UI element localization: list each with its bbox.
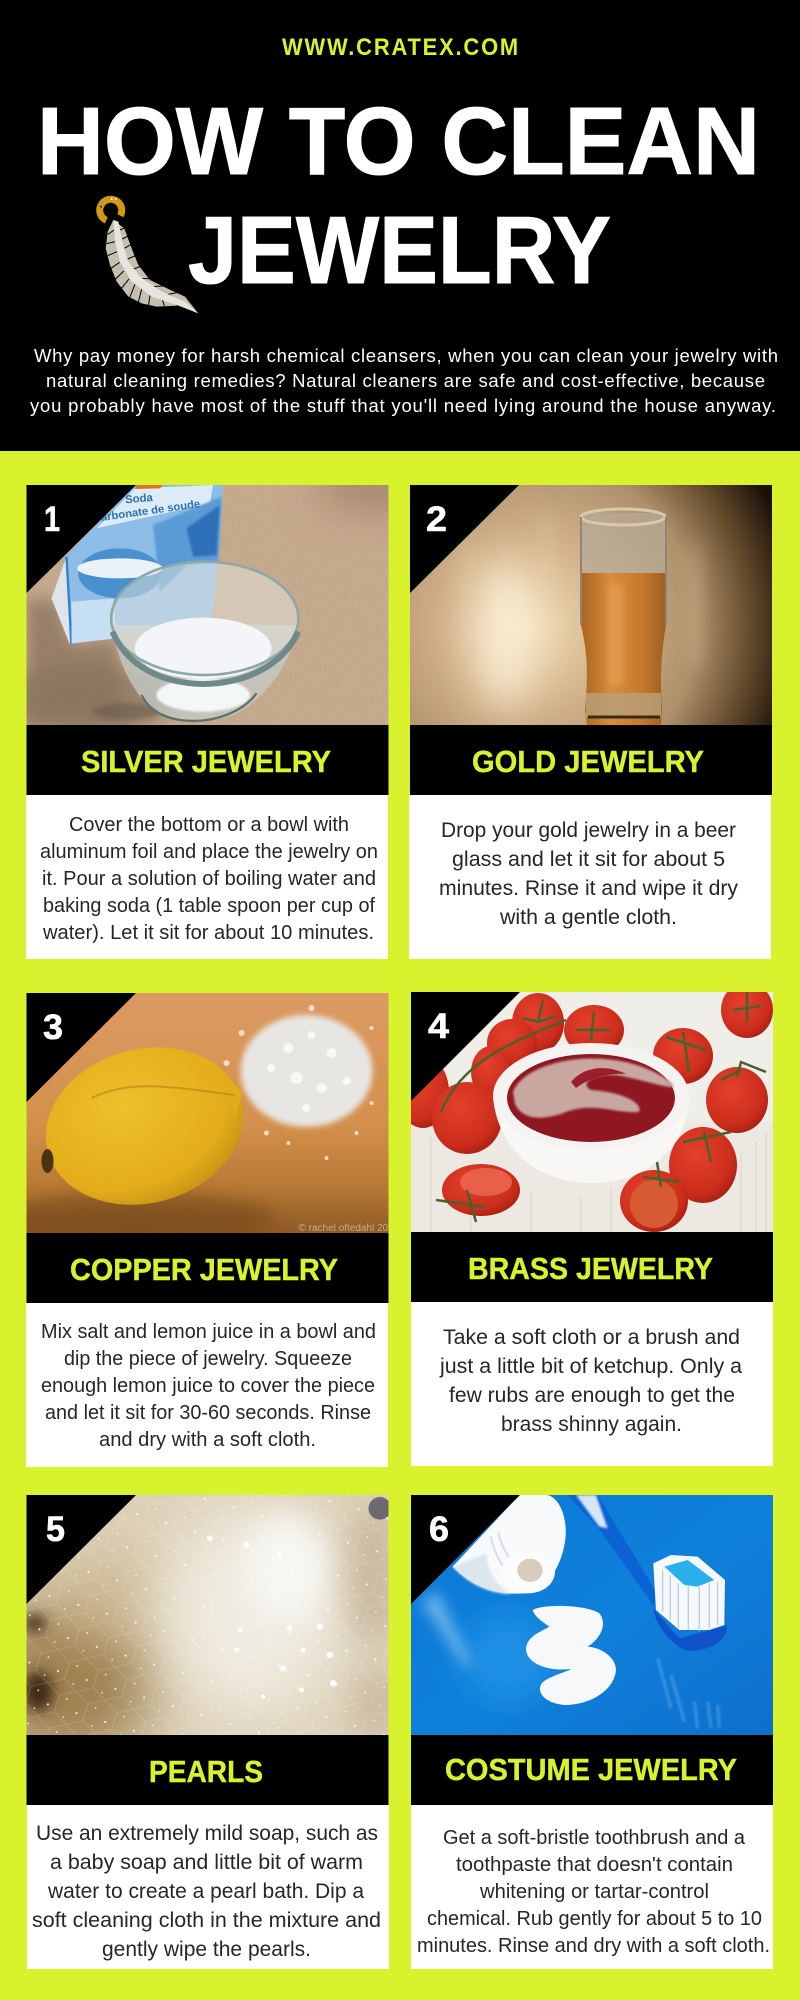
panel: silver jewelry bbox=[26, 485, 388, 959]
body text: water). Let it sit for about 10 minutes. bbox=[42, 921, 374, 944]
body text: Drop your gold jewelry in a beer bbox=[441, 818, 736, 842]
body text: minutes. Rinse and dry with a soft cloth. bbox=[417, 1934, 770, 1957]
number: 6 bbox=[429, 1510, 449, 1549]
photo: soap foam bbox=[26, 1495, 388, 1735]
intro paragraph bbox=[30, 345, 778, 416]
body text: glass and let it sit for about 5 bbox=[452, 847, 725, 871]
body text: enough lemon juice to cover the piece bbox=[41, 1374, 375, 1397]
heading: BRASS JEWELRY bbox=[468, 1251, 713, 1286]
body text bbox=[40, 813, 378, 944]
intro paragraph: natural cleaning remedies? Natural cleaners are safe and cost-effective, because bbox=[46, 370, 765, 391]
text panel bbox=[26, 1303, 388, 1467]
heading: COSTUME JEWELRY bbox=[445, 1752, 737, 1787]
text panel bbox=[411, 1302, 773, 1466]
body text: Take a soft cloth or a brush and bbox=[443, 1325, 740, 1349]
panel: pearls bbox=[0, 1495, 400, 1969]
number: 1 bbox=[44, 500, 60, 539]
title band bbox=[411, 1735, 773, 1805]
body text: and dry with a soft cloth. bbox=[99, 1428, 316, 1451]
panel: copper jewelry bbox=[0, 993, 400, 1467]
body text: baking soda (1 table spoon per cup of bbox=[43, 894, 375, 917]
intro paragraph: Why pay money for harsh chemical cleansers, when you can clean your jewelry with bbox=[34, 345, 778, 366]
title: JEWELRY bbox=[188, 197, 611, 304]
photo: lemon and salt: © rachel oftedahl 2012 bbox=[298, 1223, 400, 1234]
corner triangle bbox=[411, 1495, 520, 1604]
text panel bbox=[409, 795, 771, 959]
photo: ketchup and tomatoes bbox=[397, 982, 773, 1232]
number: 3 bbox=[43, 1008, 63, 1047]
title band bbox=[411, 1232, 773, 1302]
title band bbox=[26, 1735, 388, 1805]
body text: toothpaste that doesn't contain bbox=[456, 1853, 733, 1876]
text panel bbox=[26, 795, 388, 959]
corner triangle bbox=[411, 992, 520, 1101]
corner triangle bbox=[26, 993, 136, 1102]
heading: SILVER JEWELRY bbox=[81, 744, 331, 779]
box label text: arbonate de soude bbox=[100, 498, 201, 524]
body text: gently wipe the pearls. bbox=[102, 1937, 311, 1961]
website url: WWW.CRATEX.COM bbox=[282, 34, 520, 61]
body text bbox=[417, 1826, 770, 1957]
box label text: Soda bbox=[125, 492, 154, 506]
number: 4 bbox=[428, 1007, 450, 1046]
text panel bbox=[411, 1805, 773, 1969]
body text bbox=[41, 1320, 376, 1451]
text panel bbox=[27, 1805, 389, 1969]
body text: water to create a pearl bath. Dip a bbox=[47, 1879, 364, 1903]
heading: PEARLS bbox=[149, 1754, 263, 1789]
header panel bbox=[0, 0, 800, 451]
photo: baking soda in glass bowl bbox=[26, 485, 388, 725]
intro paragraph: you probably have most of the stuff that you'll need lying around the house anyway. bbox=[30, 395, 776, 416]
body text: aluminum foil and place the jewelry on bbox=[40, 840, 378, 863]
title bbox=[37, 88, 760, 304]
title: HOW TO CLEAN bbox=[37, 88, 760, 195]
icon: feather earring bbox=[100, 198, 198, 313]
body text: it. Pour a solution of boiling water and bbox=[42, 867, 376, 890]
panel: brass jewelry bbox=[397, 982, 773, 1466]
panel: gold jewelry bbox=[409, 485, 772, 959]
body text: just a little bit of ketchup. Only a bbox=[439, 1354, 742, 1378]
corner triangle bbox=[26, 1495, 136, 1604]
photo: toothpaste and toothbrush bbox=[411, 1495, 773, 1735]
body text: a baby soap and little bit of warm bbox=[50, 1850, 363, 1874]
number: 5 bbox=[46, 1510, 65, 1549]
body text: dip the piece of jewelry. Squeeze bbox=[64, 1347, 352, 1370]
title band bbox=[26, 1233, 388, 1303]
body text: with a gentle cloth. bbox=[499, 905, 677, 929]
body text: brass shinny again. bbox=[501, 1412, 682, 1436]
body text: Mix salt and lemon juice in a bowl and bbox=[41, 1320, 376, 1343]
body text: minutes. Rinse it and wipe it dry bbox=[439, 876, 738, 900]
body text: soft cleaning cloth in the mixture and bbox=[32, 1908, 381, 1932]
title band bbox=[26, 725, 388, 795]
title band bbox=[410, 725, 772, 795]
body text bbox=[32, 1821, 381, 1961]
body text: chemical. Rub gently for about 5 to 10 bbox=[427, 1907, 762, 1930]
corner triangle bbox=[26, 485, 136, 593]
number: 2 bbox=[426, 500, 447, 539]
body text: and let it sit for 30-60 seconds. Rinse bbox=[45, 1401, 371, 1424]
body text: few rubs are enough to get the bbox=[449, 1383, 735, 1407]
body text: Use an extremely mild soap, such as bbox=[36, 1821, 378, 1845]
heading: GOLD JEWELRY bbox=[472, 744, 704, 779]
body text bbox=[439, 1325, 742, 1436]
body text: whitening or tartar-control bbox=[479, 1880, 709, 1903]
corner triangle bbox=[410, 485, 519, 593]
photo: beer glass bbox=[410, 485, 772, 725]
photo: lemon and salt bbox=[26, 993, 388, 1233]
body text bbox=[439, 818, 738, 929]
heading: COPPER JEWELRY bbox=[70, 1252, 338, 1287]
body text: Cover the bottom or a bowl with bbox=[69, 813, 349, 836]
body text: Get a soft-bristle toothbrush and a bbox=[443, 1826, 746, 1849]
panel: costume jewelry bbox=[411, 1495, 773, 1969]
